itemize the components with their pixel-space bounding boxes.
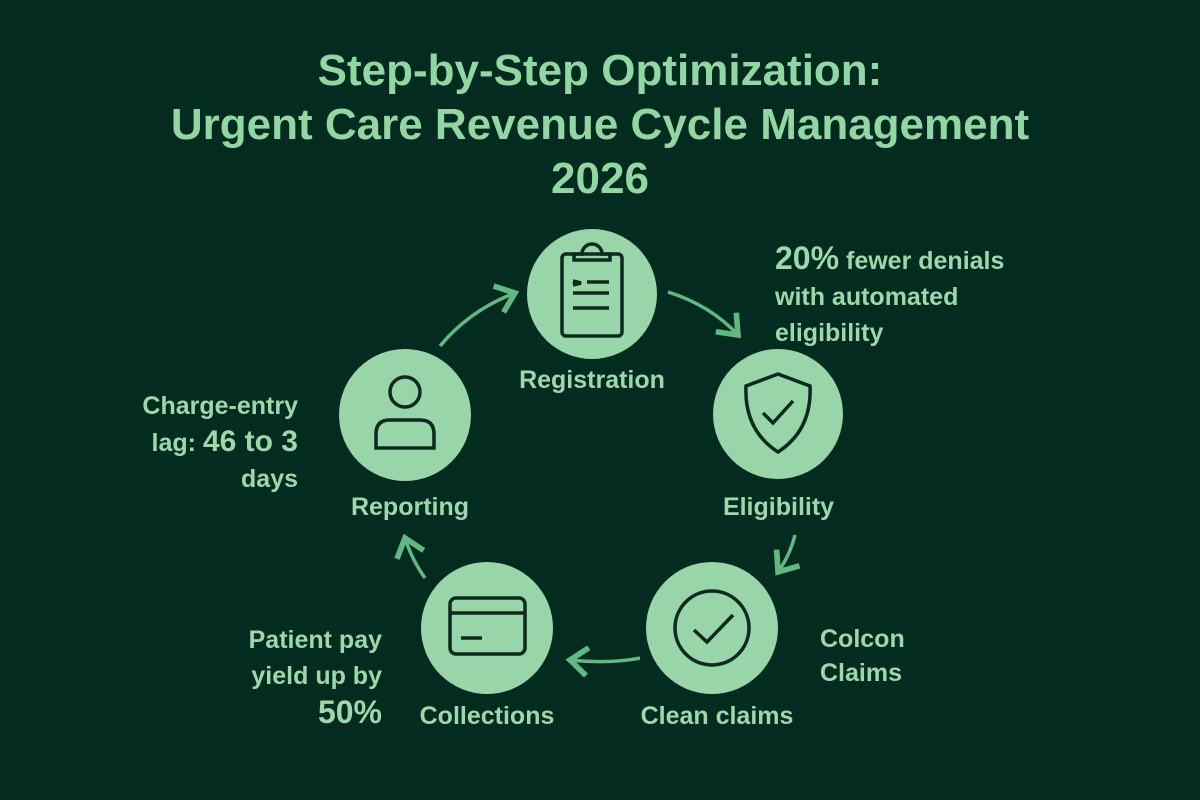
title: 2026 [551,154,649,203]
callout: denials [775,240,1004,347]
circle: registration [527,229,657,359]
callout: colcon claims [820,625,905,687]
callout: patient pay: Patient pay [249,626,382,654]
circle: reporting [339,349,471,481]
label: clean claims: Clean claims [641,702,793,730]
callout: denials: eligibility [775,319,883,347]
circle: clean claims [646,562,778,694]
callout: charge-entry lag [142,392,298,493]
callout: patient pay: 50% [318,694,382,730]
label: reporting: Reporting [351,493,469,521]
arrows [405,292,795,662]
circle: eligibility [713,349,843,479]
label: registration: Registration [519,366,665,394]
callout: charge-entry lag: days [241,465,298,493]
callout: denials: 20% fewer denials [775,240,1004,276]
title: Step-by-Step Optimization: [318,46,882,95]
callout: patient pay: yield up by [251,662,382,690]
title: Urgent Care Revenue Cycle Management [171,100,1029,149]
callout: colcon claims: Colcon [820,625,905,653]
callout: charge-entry lag: lag: 46 to 3 [152,425,298,458]
callout: patient pay [249,626,382,730]
callout: denials: with automated [775,283,958,311]
title [171,46,1029,203]
callout: charge-entry lag: Charge-entry [142,392,298,420]
callout: colcon claims: Claims [820,659,902,687]
label: eligibility: Eligibility [723,493,834,521]
circle: collections [421,562,553,694]
label: collections: Collections [420,702,554,730]
